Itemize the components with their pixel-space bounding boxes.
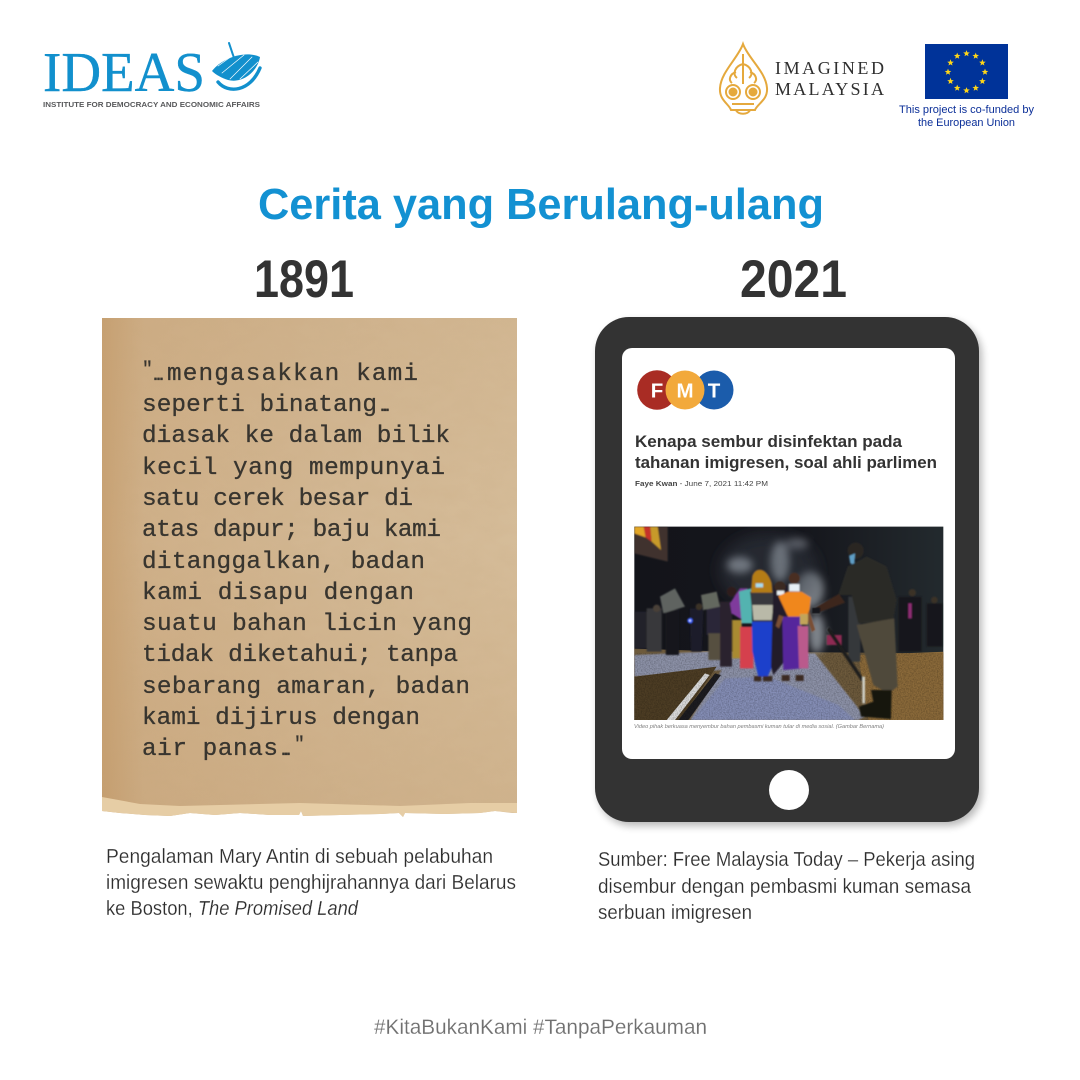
home button [769, 770, 809, 810]
quote text: kami disapu dengan [142, 580, 414, 607]
tablet screen [622, 348, 955, 759]
quote text: air panas [142, 736, 278, 763]
quote text: ... [279, 743, 293, 760]
funding note: This project is co-funded by [899, 104, 1035, 116]
quote text [142, 360, 472, 763]
logo: FMT: T [708, 380, 721, 402]
icon: ring of stars [945, 50, 988, 93]
text block: left caption: ke Boston, The Promised Land [106, 898, 359, 920]
text block: left caption: imigresen sewaktu penghijrahannya dari Belarus [106, 872, 516, 894]
title: Cerita yang Berulang-ulang [258, 180, 824, 229]
icon: IDEAS bird [212, 43, 260, 89]
logo: Imagined Malaysia: IMAGINED [775, 58, 884, 78]
panel: aged paper quote [102, 318, 517, 817]
officer with sprayer [848, 543, 864, 559]
photo caption: Video pihak berkuasa menyembur bahan pembasmi kuman tular di media sosial. (Gambar Bernama) [634, 724, 884, 730]
background crowd [634, 612, 654, 648]
logo: FMT: M [676, 380, 694, 402]
hashtags: #KitaBukanKami #TanpaPerkauman [374, 1016, 707, 1039]
article headline [635, 433, 937, 472]
quote text: mengasakkan kami [167, 361, 418, 388]
logo: IDEAS: IDEAS [43, 42, 205, 104]
quote text: suatu bahan licin yang [142, 611, 472, 638]
migrants [730, 588, 748, 620]
quote text: kecil yang mempunyai [142, 455, 445, 482]
article byline: Faye Kwan - June 7, 2021 11:42 PM [635, 479, 768, 488]
quote text: ... [378, 399, 392, 416]
article photo [625, 520, 945, 720]
text block: right caption: serbuan imigresen [598, 902, 752, 924]
organisation name: INSTITUTE FOR DEMOCRACY AND ECONOMIC AFFAIRS [43, 100, 260, 109]
logo: FMT: F [651, 380, 663, 402]
text block: right caption: Sumber: Free Malaysia Today – Pekerja asing [598, 849, 975, 871]
quote text: sebarang amaran, badan [142, 674, 470, 701]
text block: right caption: disembur dengan pembasmi kuman semasa [598, 876, 972, 898]
article headline: tahanan imigresen, soal ahli parlimen [635, 454, 937, 472]
photo content softened [634, 527, 943, 719]
logo: FMT [637, 370, 734, 410]
heading: 2021: 2021 [740, 250, 847, 309]
panel: tablet [595, 317, 982, 826]
logo: Imagined Malaysia: MALAYSIA [775, 79, 884, 99]
quote text: atas dapur; baju kami [142, 517, 441, 544]
text block: left caption: Pengalaman Mary Antin di sebuah pelabuhan [106, 846, 493, 868]
logo: EU flag: the European Union [918, 117, 1015, 129]
heading: 1891: 1891 [254, 250, 354, 309]
logo: EU flag [899, 44, 1035, 129]
ground [625, 648, 945, 720]
icon: gold wayang ornament [720, 44, 767, 114]
quote text: " [294, 735, 305, 755]
quote text: ditanggalkan, badan [142, 549, 425, 576]
smoke [727, 539, 825, 653]
quote text: tidak diketahui; tanpa [142, 642, 458, 669]
text block: left caption [106, 846, 516, 920]
quote text: ... [151, 368, 166, 385]
article headline: Kenapa sembur disinfektan pada [635, 433, 903, 451]
logo: Imagined Malaysia [720, 44, 884, 114]
quote text: " [142, 360, 153, 380]
quote text: satu cerek besar di [142, 486, 413, 513]
quote text: kami dijirus dengan [142, 705, 420, 732]
quote text: diasak ke dalam bilik [142, 423, 450, 450]
quote text: seperti binatang [142, 392, 377, 419]
text block: right caption [598, 849, 975, 924]
banner corner [634, 527, 668, 562]
